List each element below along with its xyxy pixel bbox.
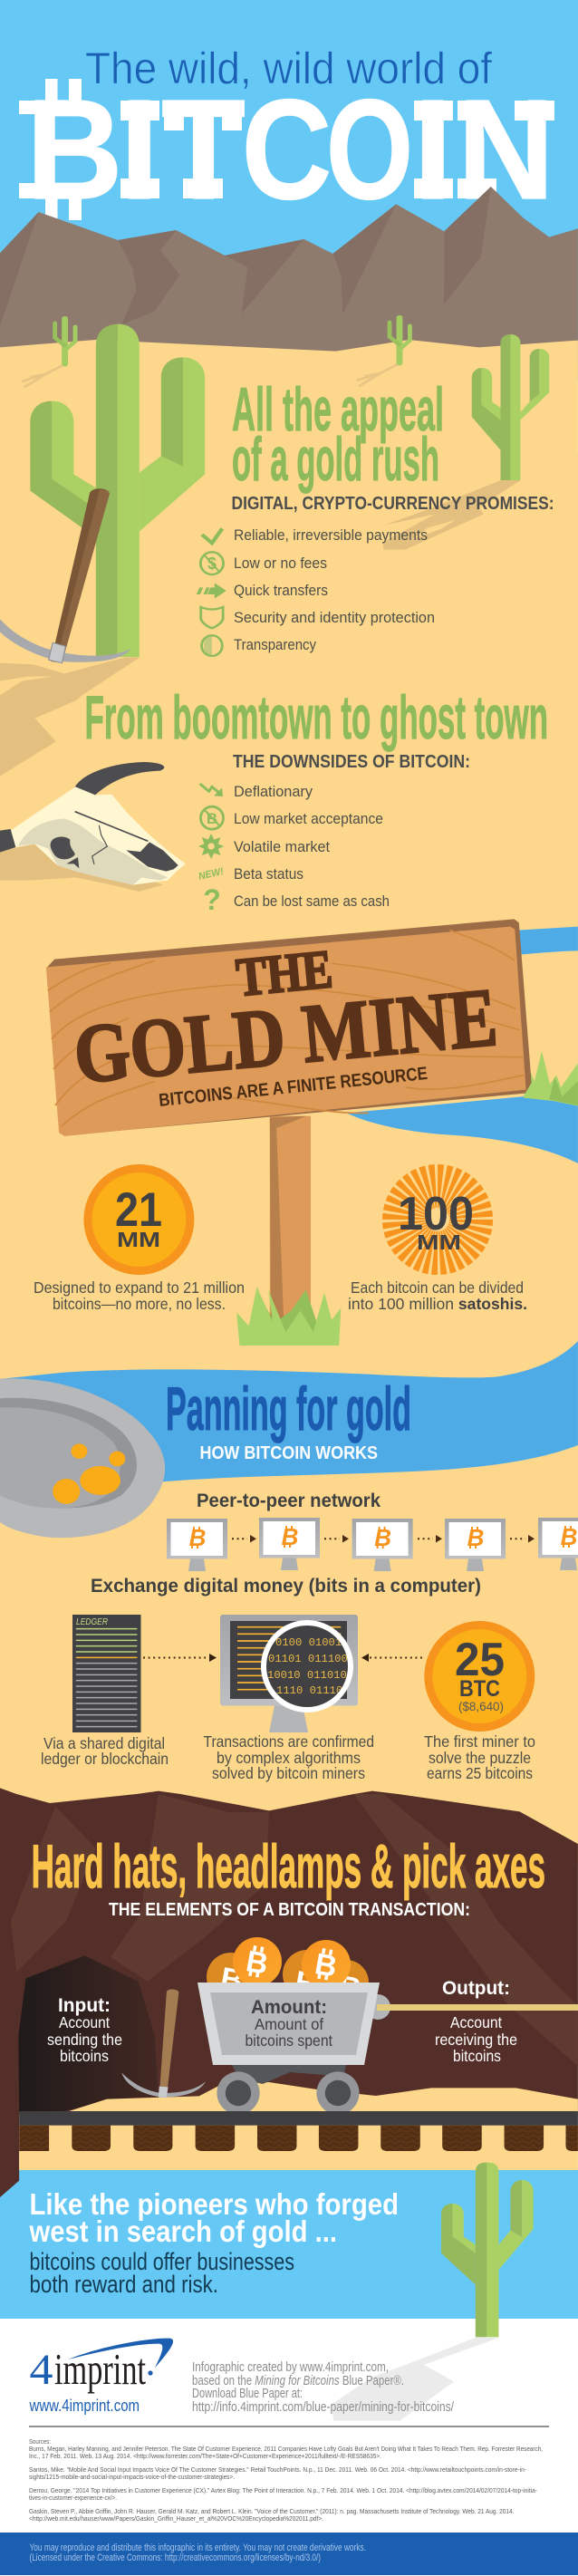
credit text: based on the Mining for Bitcoins Blue Paper®.	[192, 2373, 404, 2388]
arrow: ledger to monitor	[143, 1654, 217, 1662]
caption: transactions: Transactions are confirmed	[203, 1732, 374, 1751]
list: downsides: Can be lost same as cash	[234, 892, 390, 910]
grass right of sign	[524, 1051, 578, 1106]
mine cart	[197, 1983, 380, 2115]
cactus shadow on white	[332, 2338, 498, 2421]
big cactus left	[30, 324, 205, 657]
closing statement	[29, 2187, 399, 2298]
back coins: B	[218, 1961, 246, 1999]
label: output: Output:	[442, 1978, 510, 1999]
mountains	[0, 187, 578, 362]
caption: transactions: solved by bitcoin miners	[212, 1764, 365, 1782]
label: peer-to-peer network: Peer-to-peer network	[197, 1491, 381, 1511]
title: BITCOIN: O	[326, 71, 413, 229]
list: promises: Transparency	[234, 636, 316, 653]
monitor 2	[259, 1518, 320, 1570]
caption: ledger: ledger or blockchain	[41, 1750, 169, 1768]
title: BITCOIN: T	[161, 71, 246, 229]
illustration: ledger: LEDGER	[76, 1617, 108, 1627]
icon: burst	[198, 834, 224, 859]
label: input: bitcoins	[60, 2047, 109, 2065]
caption: 21 million	[34, 1278, 245, 1313]
magnifier with binary: 0100 01001	[275, 1636, 342, 1649]
label: amount: Amount of	[255, 2015, 323, 2033]
back coins	[207, 1950, 369, 1983]
illustration: monitor with magnifier	[220, 1615, 358, 1732]
stat: 21 MM coin: MM	[117, 1228, 160, 1251]
sources: Sources:	[29, 2437, 51, 2446]
sign board: the gold mine	[46, 919, 532, 1136]
icon: no bitcoin	[201, 806, 223, 829]
label: output: bitcoins	[453, 2047, 501, 2065]
small cactus left	[23, 319, 75, 387]
monitor 1: B	[189, 1524, 206, 1551]
list: promises	[197, 526, 435, 656]
sources: tives-in-customer-experience-cx/>.	[29, 2494, 117, 2502]
sign board: the gold mine: THE	[234, 939, 335, 1008]
magnifier with binary	[264, 1623, 351, 1710]
stat: 100 MM sunburst: MM	[417, 1230, 461, 1254]
magnifier with binary: 10010 011010	[267, 1669, 347, 1682]
sky band at bottom	[0, 2168, 578, 2319]
subheading: how bitcoin works: HOW BITCOIN WORKS	[199, 1443, 378, 1463]
icon: no bitcoin: B	[207, 810, 217, 827]
closing statement: west in search of gold ...	[29, 2214, 337, 2248]
list: promises: Reliable, irreversible payments	[234, 526, 428, 544]
signpost	[270, 1116, 311, 1326]
front coins: B	[244, 1944, 271, 1981]
magnifier with binary: 1110 01110	[276, 1684, 342, 1697]
credit text: http://info.4imprint.com/blue-paper/mining-for-bitcoins/	[192, 2399, 455, 2415]
icon: shield	[201, 607, 223, 628]
caption: first miner: The first miner to	[424, 1732, 535, 1751]
subheading: elements of a transaction: THE ELEMENTS OF A BITCOIN TRANSACTION:	[109, 1900, 470, 1920]
label: exchange digital money: Exchange digital money (bits in a computer)	[91, 1576, 481, 1597]
stat: 25 BTC coin	[424, 1621, 535, 1732]
stat: 21 MM coin: 21	[115, 1183, 162, 1237]
label: output	[435, 1978, 517, 2065]
title: BITCOIN: N	[458, 71, 554, 229]
monitor 5: B	[561, 1523, 577, 1550]
title: BITCOIN	[19, 71, 554, 229]
river behind sign	[346, 927, 578, 1163]
desert sand ground	[0, 340, 578, 1867]
credit text	[192, 2359, 455, 2415]
back coins: B	[293, 1964, 320, 2002]
sources: Santos, Mike. "Mobile And Social Input Impacts Voice Of The Customer Strategies." Retail TouchPoints. N.p., 11 Dec. 2011. Web. 06 Oct. 2014. <http://www.retailtouchpoints.com/in-store-in-	[29, 2465, 526, 2474]
dotted arrows between monitors	[232, 1535, 535, 1542]
logo: 4imprint: 4	[29, 2346, 53, 2394]
white credits background	[0, 2319, 578, 2533]
sources: sights/1215-mobile-and-social-input-impacts-voice-of-the-customer-strategies>.	[29, 2473, 235, 2481]
list: downsides: Low market acceptance	[234, 810, 383, 827]
arrow: coin to monitor	[361, 1654, 422, 1662]
monitor 3: B	[374, 1524, 391, 1551]
footer licence bar: You may reproduce and distribute this infographic in its entirety. You may not create derivative works.	[29, 2542, 366, 2553]
title: BITCOIN: B	[26, 71, 123, 229]
bitcoins in cart	[207, 1937, 369, 1983]
stat: 25 BTC coin: 25	[455, 1634, 505, 1686]
illustration: gold pan	[0, 1378, 165, 1538]
title: BITCOIN: I	[413, 71, 453, 229]
cactus shadows	[0, 480, 520, 777]
magnifier with binary: 01101 011100	[268, 1653, 348, 1665]
list: promises: Low or no fees	[234, 555, 327, 572]
grass at base of post	[236, 1287, 341, 1346]
icon: no dollar: $	[207, 555, 217, 573]
caption: first miner	[424, 1732, 535, 1782]
footer licence bar	[0, 2533, 578, 2575]
caption: satoshis: Each bitcoin can be divided	[351, 1278, 524, 1297]
icon: question mark: ?	[203, 883, 221, 916]
closing statement: bitcoins could offer businesses	[29, 2248, 294, 2275]
credit text: Infographic created by www.4imprint.com,	[192, 2359, 389, 2375]
stat: 100 MM sunburst: 100	[398, 1188, 474, 1240]
caption: ledger: Via a shared digital	[43, 1734, 165, 1752]
list: downsides	[197, 783, 390, 916]
icon: half circle	[202, 635, 222, 656]
list: downsides: Deflationary	[234, 783, 313, 800]
credit text: Download Blue Paper at:	[192, 2386, 303, 2401]
title: the wild, wild world of: The wild, wild world of	[85, 44, 492, 93]
monitor 4: B	[467, 1524, 484, 1551]
caption: transactions: by complex algorithms	[217, 1749, 361, 1767]
stat: 25 BTC coin: ($8,640)	[458, 1699, 504, 1713]
logo: 4imprint	[29, 2339, 173, 2394]
sources: Inc., 17 Feb. 2011. Web. 13 Aug. 2014. <http://www.forrester.com/The+State+Of+Customer+Experience+2011/fulltext/-/E-RES58635>.	[29, 2452, 381, 2460]
caption: satoshis	[348, 1278, 527, 1313]
stat: 21 MM coin	[83, 1164, 194, 1275]
rope and hook	[365, 1994, 578, 2020]
sign board: the gold mine: GOLD MINE	[71, 970, 501, 1101]
front coins	[233, 1937, 351, 1983]
icon: new badge: NEW!	[197, 866, 225, 883]
list: downsides: Volatile market	[234, 838, 330, 855]
diagram: peer-to-peer monitors	[167, 1518, 578, 1571]
stat: 25 BTC coin: BTC	[459, 1676, 500, 1702]
pick axe	[0, 488, 130, 663]
closing statement: both reward and risk.	[29, 2271, 218, 2298]
cactus right of heading	[472, 334, 549, 480]
logo url: www.4imprint.com	[29, 2397, 140, 2415]
monitor 5	[538, 1518, 578, 1570]
small cactus right	[358, 318, 409, 386]
monitor 2: B	[282, 1523, 298, 1550]
caption: 21 million: bitcoins—no more, no less.	[53, 1295, 226, 1313]
label: input: Input:	[58, 1995, 111, 2016]
front coins: B	[313, 1946, 340, 1983]
label: input: Account	[59, 2013, 110, 2031]
caption: first miner: solve the puzzle	[429, 1749, 531, 1767]
mine cave	[0, 1788, 578, 2197]
sources: <http://web.mit.edu/hauser/www/Papers/Gaskin_Griffin_Hauser_et_al%20VOC%20Encyclopedia%202011.pdf>.	[29, 2514, 323, 2523]
caption: ledger	[41, 1734, 169, 1768]
monitor 1	[167, 1519, 227, 1571]
list: downsides: Beta status	[234, 865, 303, 883]
sources	[29, 2437, 543, 2523]
title: BITCOIN: I	[120, 71, 159, 229]
label: input	[47, 1995, 122, 2065]
caption: first miner: earns 25 bitcoins	[427, 1764, 533, 1782]
monitor 3	[352, 1519, 413, 1571]
label: amount	[245, 1997, 332, 2050]
icon: no dollar	[200, 552, 224, 574]
illustration: cow skull	[0, 762, 186, 892]
back coins: B	[336, 1969, 363, 2007]
sky background	[0, 0, 578, 381]
heading: all the appeal of a gold rush	[232, 375, 444, 494]
caption: satoshis: into 100 million satoshis.	[348, 1295, 527, 1313]
slab serifs and bitcoin bars	[19, 79, 554, 220]
footer licence bar: (Licensed under the Creative Commons: http://creativecommons.org/licenses/by-nd/3.0/)	[29, 2552, 321, 2563]
icon: check mark	[202, 528, 222, 543]
pick axe in cave	[121, 1990, 206, 2098]
illustration: ledger	[72, 1615, 141, 1732]
mine rail and ties	[19, 2111, 578, 2170]
caption: 21 million: Designed to expand to 21 million	[34, 1278, 245, 1297]
label: input: sending the	[47, 2031, 122, 2049]
logo: 4imprint: imprint	[54, 2344, 146, 2394]
bottom cactus	[441, 2163, 534, 2337]
icon: falling arrow	[200, 784, 223, 796]
caption: transactions	[203, 1732, 374, 1782]
label: amount: Amount:	[251, 1997, 327, 2018]
icon: fast arrow	[197, 583, 226, 599]
list: promises: Quick transfers	[234, 582, 328, 599]
closing statement: Like the pioneers who forged	[29, 2187, 399, 2221]
river band: panning for gold	[0, 1341, 578, 1492]
monitor 4	[445, 1519, 506, 1571]
label: amount: bitcoins spent	[245, 2031, 332, 2050]
label: output: receiving the	[435, 2031, 517, 2049]
subheading: downsides: THE DOWNSIDES OF BITCOIN:	[233, 752, 470, 772]
label: output: Account	[450, 2013, 502, 2031]
sources: Gaskin, Steven P., Abbie Griffin, John R. Hauser, Gerald M. Katz, and Robert L. Klein. "Voice of the Customer." (2011): n. pag. Massachusetts Institute of Technology. Web. 21 Aug. 2014.	[29, 2507, 515, 2515]
list: promises: Security and identity protection	[234, 609, 435, 626]
sign board: the gold mine: BITCOINS ARE A FINITE RESOURCE	[158, 1064, 429, 1111]
title: BITCOIN: C	[242, 71, 332, 229]
